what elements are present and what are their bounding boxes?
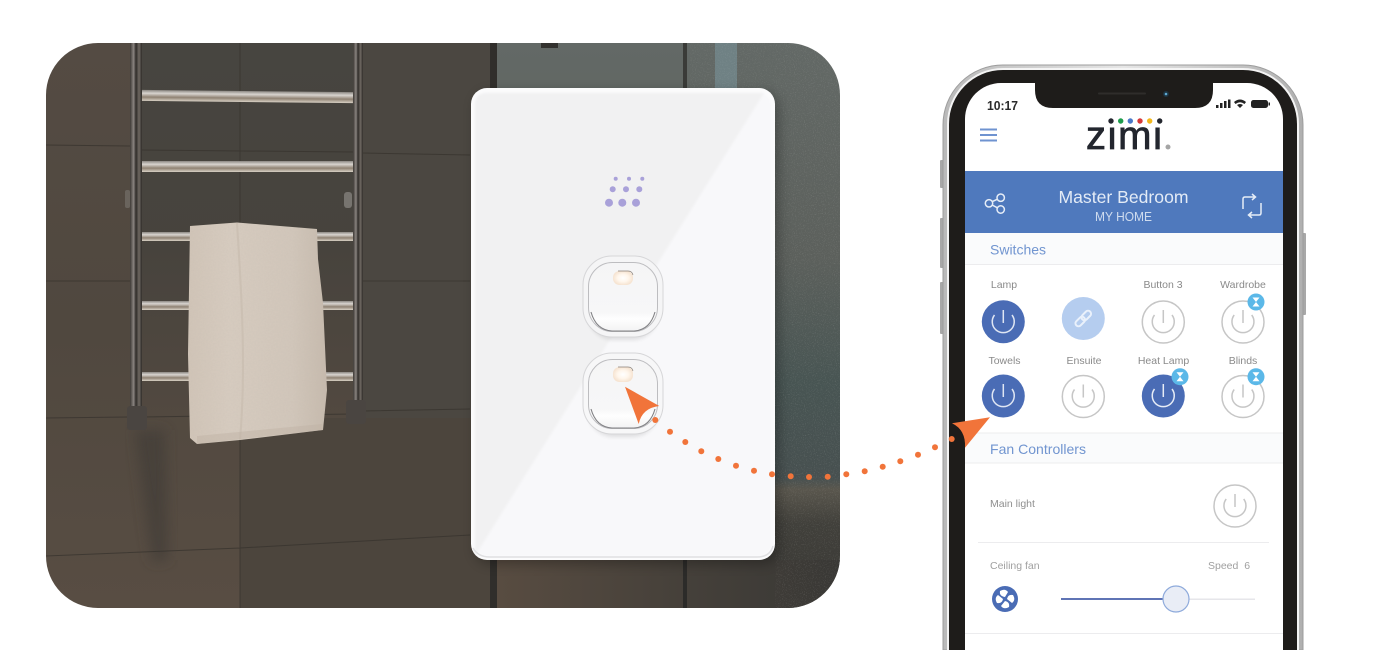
arrowhead on wall switch [625,387,659,424]
arrowhead on app button [952,417,990,448]
zimi logo: zimi [1086,114,1162,158]
photo panel: bathroom wall with heated towel rail [46,43,840,608]
fan icon [992,586,1018,612]
main light label: Main light [990,498,1035,510]
heat lamp switch on with timer [1142,368,1188,418]
linked switch [1062,297,1105,340]
phone body [943,65,1303,650]
glass reflection [475,93,764,556]
switch labels: Button 3 [1143,279,1183,291]
fan speed label: Speed 6 [1208,560,1250,572]
home subtitle: MY HOME [1095,210,1152,224]
status bar time: 10:17 [987,98,1018,113]
blinds switch off with timer [1222,368,1264,418]
switch labels: Wardrobe [1220,279,1266,291]
switches heading: Switches [990,242,1046,258]
towels switch on [982,374,1025,418]
switch labels [988,279,1266,367]
share icon [985,194,1004,213]
wardrobe switch off with timer [1222,294,1264,343]
connector: dotted orange arrow from switch to app [625,387,990,480]
wall tiles [46,43,498,608]
fan controllers heading: Fan Controllers [990,441,1086,457]
glass shower screen [490,43,840,608]
room title: Master Bedroom [1058,187,1188,207]
heated towel rail [125,43,366,430]
ensuite switch off [1062,376,1104,418]
ceiling fan label: Ceiling fan [990,560,1040,572]
switch labels: Heat Lamp [1138,355,1189,367]
switch labels: Towels [988,355,1021,367]
switch labels: Blinds [1229,355,1257,367]
sensor dots [605,177,644,207]
section header: fan controllers [965,433,1283,463]
towel [186,220,330,446]
phone side buttons [940,160,1306,334]
status bar icons [1216,100,1270,108]
dotted path [652,417,955,480]
button 3 switch off [1142,301,1184,343]
fan speed slider [1061,586,1255,612]
smart switch wall plate [471,88,779,564]
plate face, lower right [475,93,771,556]
lamp switch on [982,300,1025,343]
switch labels: Ensuite [1066,355,1102,367]
smartphone [940,65,1306,650]
swap room icon [1243,194,1261,218]
switch button: top [583,256,663,340]
camera notch [1035,83,1213,108]
phone screen [965,83,1283,650]
switch button: bottom [583,353,663,437]
menu icon [980,130,997,140]
switch labels: Lamp [991,279,1017,291]
app header bar [965,171,1283,233]
section header: switches [965,233,1283,264]
main light switch [1214,485,1256,527]
